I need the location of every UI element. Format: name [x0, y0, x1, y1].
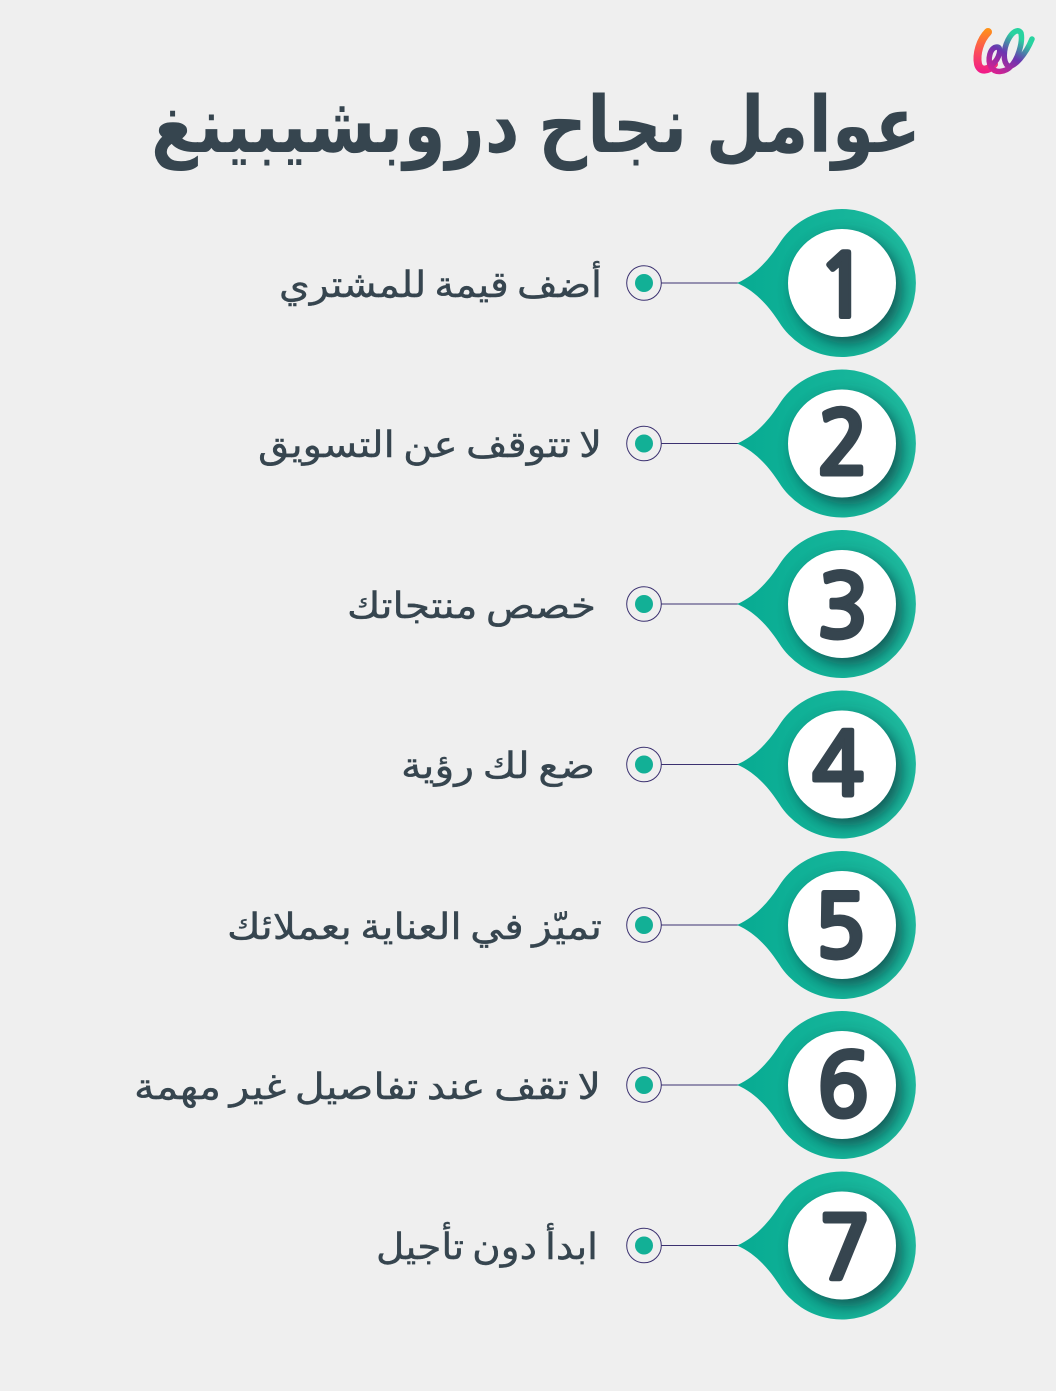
- badge 3: 3: [816, 565, 870, 652]
- item 1: [279, 209, 916, 357]
- bullet 5: [627, 908, 661, 942]
- badge 2: [737, 370, 916, 518]
- connector 7: [661, 1244, 740, 1246]
- badge 1: [737, 209, 916, 357]
- bullet 6: [627, 1068, 661, 1102]
- item 5: [227, 851, 916, 999]
- item 4: [401, 690, 916, 838]
- badge 6: 6: [816, 1044, 870, 1131]
- item 7: [376, 1172, 916, 1320]
- connector 2: [661, 442, 740, 444]
- item 2: [258, 370, 916, 518]
- badge 7: 7: [818, 1206, 872, 1294]
- badge 1: 1: [816, 244, 870, 331]
- label 7: ابدأ دون تأجيل: [376, 1222, 598, 1268]
- bullet 4: [627, 747, 661, 782]
- bullet 7: [627, 1228, 661, 1263]
- label 5: تميّز في العناية بعملائك: [227, 907, 602, 948]
- item 3: [347, 530, 916, 678]
- bullet 2: [627, 426, 661, 461]
- label 2: لا تتوقف عن التسويق: [258, 425, 602, 466]
- label 1: أضف قيمة للمشتري: [279, 261, 602, 306]
- bullet 1: [627, 266, 661, 300]
- connector 6: [661, 1084, 740, 1086]
- badge 6: [737, 1011, 916, 1159]
- label 6: لا تقف عند تفاصيل غير مهمة: [134, 1067, 601, 1108]
- badge 2: 2: [816, 402, 870, 488]
- title: عوامل نجاح دروبشيبينغ: [151, 81, 921, 171]
- badge 4: 4: [811, 722, 865, 810]
- item 6: [134, 1011, 916, 1159]
- connector 3: [661, 603, 740, 605]
- badge 5: [737, 851, 916, 999]
- bullet 3: [627, 587, 661, 621]
- badge 3: [737, 530, 916, 678]
- connector 4: [661, 764, 740, 766]
- logo: [977, 31, 1032, 71]
- connector 1: [661, 282, 740, 284]
- badge 5: 5: [813, 885, 867, 972]
- label 3: خصص منتجاتك: [347, 586, 596, 627]
- badge 4: [737, 690, 916, 838]
- badge 7: [737, 1172, 916, 1320]
- connector 5: [661, 924, 740, 926]
- label 4: ضع لك رؤية: [401, 746, 595, 787]
